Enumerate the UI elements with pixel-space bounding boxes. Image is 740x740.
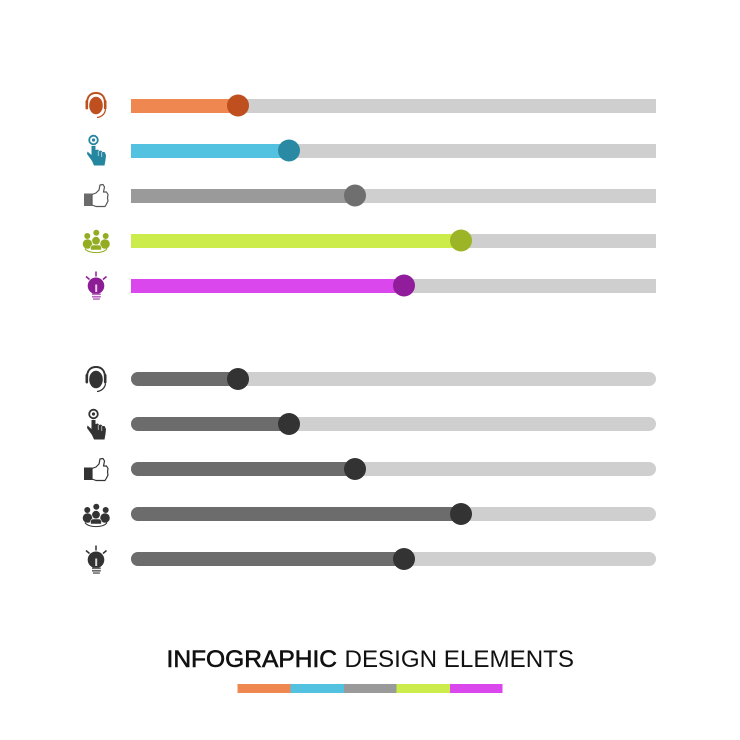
title: INFOGRAPHIC <box>166 646 337 673</box>
icon: black pointing hand <box>87 410 106 440</box>
slider: green <box>131 230 656 252</box>
icon: black light bulb <box>86 546 106 574</box>
slider: dark 1 <box>131 368 656 390</box>
slider: dark 5 <box>131 548 656 570</box>
icon: blue pointing hand <box>87 136 106 166</box>
slider: dark 3 <box>131 458 656 480</box>
icon: green people group <box>83 230 110 253</box>
slider: blue <box>131 140 656 162</box>
slider: dark 2 <box>131 413 656 435</box>
panel: monochrome sliders <box>83 367 656 574</box>
icon: orange headset <box>86 93 106 118</box>
panel: coloured sliders <box>83 93 656 300</box>
slider: magenta <box>131 274 656 296</box>
icon: black headset <box>86 367 106 392</box>
icon: black people group <box>83 504 110 527</box>
icon: purple light bulb <box>86 272 106 300</box>
slider: grey <box>131 184 656 206</box>
slider: orange <box>131 94 656 116</box>
icon: black thumbs up <box>84 458 108 480</box>
title <box>166 646 574 673</box>
slider: dark 4 <box>131 503 656 525</box>
colour legend strip <box>238 684 502 693</box>
icon: grey thumbs up <box>84 184 108 206</box>
title: DESIGN ELEMENTS <box>344 646 574 673</box>
